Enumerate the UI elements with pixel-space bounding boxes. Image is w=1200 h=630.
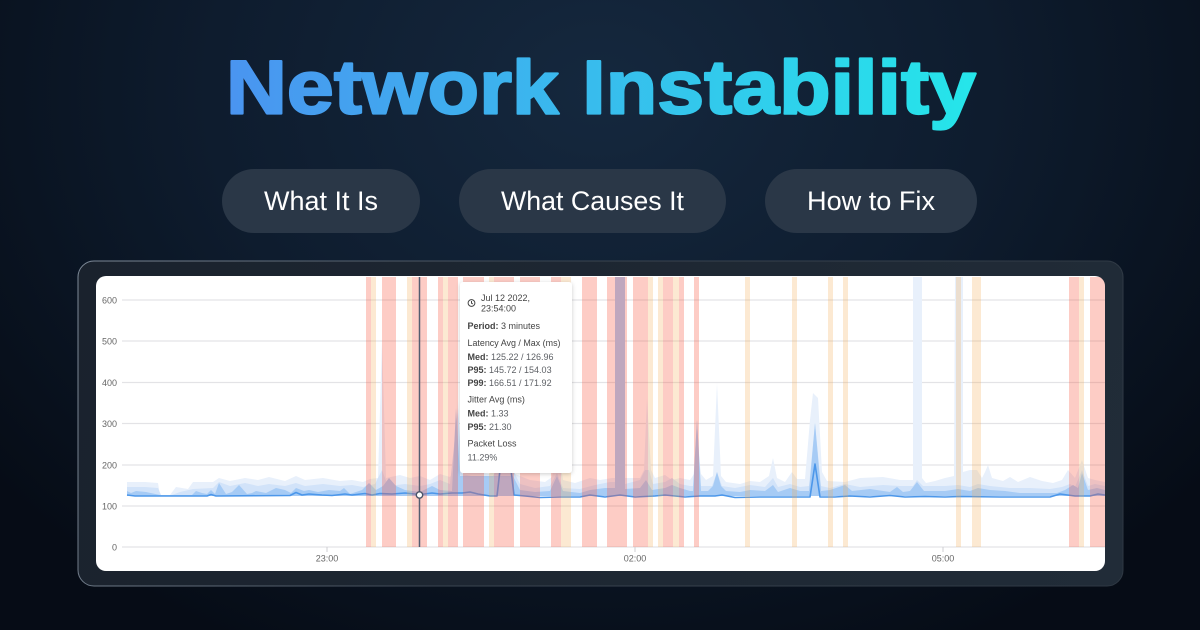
pill: what it is: What It Is [264,186,378,216]
tooltip jitter: P95: 21.30 [468,422,512,432]
area: P95 latency band [127,411,1105,495]
pill: how to fix: How to Fix [807,186,935,216]
tooltip latency [468,338,560,388]
tooltip date: Jul 12 2022, [481,293,530,303]
y axis labels: 400 [102,378,117,388]
event stripes: high packet loss [366,277,1105,547]
x axis labels: 23:00 [316,554,338,564]
icon: clock [468,300,475,306]
cursor line [418,277,420,547]
tooltip packet loss: 11.29% [468,452,497,462]
tooltip date [481,293,530,314]
y axis grid lines [122,300,1105,547]
x axis labels [316,554,954,564]
tooltip period: Period: 3 minutes [468,321,541,331]
tooltip latency: Med: 125.22 / 126.96 [468,352,554,362]
y axis labels: 600 [102,296,117,306]
y axis labels: 500 [102,336,117,346]
panel: chart frame [78,261,1123,586]
y axis labels: 300 [102,419,117,429]
topic pills [222,169,977,233]
area: median to P95 core band [127,277,1105,496]
line: median latency [127,464,1105,498]
event stripes: moderate packet loss [371,277,1084,547]
x axis ticks [327,547,943,552]
tooltip jitter: Jitter Avg (ms) [468,394,525,404]
tooltip jitter [468,394,525,432]
y axis labels: 100 [102,502,117,512]
y axis labels: 200 [102,460,117,470]
cursor marker [416,492,423,498]
area: P99 latency band [127,277,1105,496]
pill: what it is [222,169,420,233]
pill: what causes it [459,169,726,233]
tooltip packet loss [468,438,517,462]
tooltip latency: P99: 166.51 / 171.92 [468,378,552,388]
tooltip latency: Latency Avg / Max (ms) [468,338,560,348]
y axis labels: 0 [112,542,117,552]
pill: how to fix [765,169,977,233]
tooltip [460,282,572,473]
tooltip packet loss: Packet Loss [468,438,517,448]
panel: latency chart card [96,276,1105,571]
y axis labels [102,296,117,552]
x axis labels: 02:00 [624,554,646,564]
tooltip date: 23:54:00 [481,304,516,314]
tooltip latency: P95: 145.72 / 154.03 [468,365,552,375]
pill: what causes it: What Causes It [501,186,684,216]
tooltip jitter: Med: 1.33 [468,408,509,418]
title: Network Instability [226,46,976,130]
x axis labels: 05:00 [932,554,954,564]
